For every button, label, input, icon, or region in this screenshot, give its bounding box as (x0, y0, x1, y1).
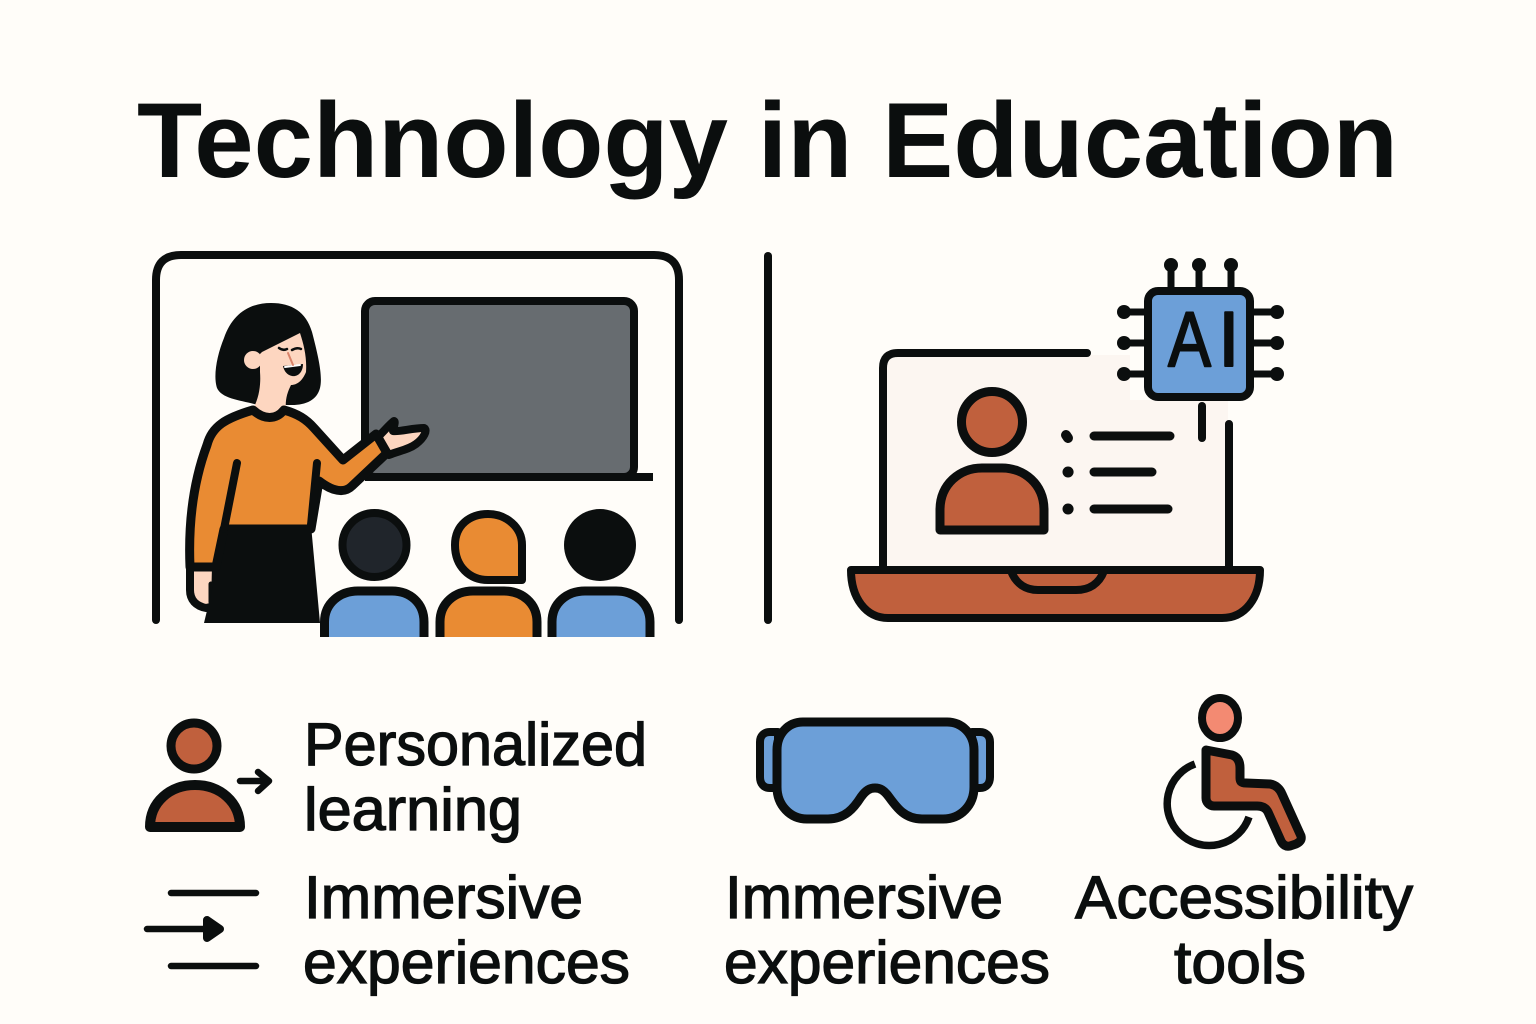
profile list (1066, 435, 1170, 509)
label: personalized learning (304, 711, 647, 843)
label: accessibility tools: Accessibility (1075, 864, 1413, 931)
AI chip (1117, 258, 1284, 438)
laptop base (851, 570, 1260, 618)
students (324, 509, 650, 637)
label: personalized learning: Personalized (304, 711, 647, 778)
icon: VR goggles (760, 722, 990, 819)
label: immersive experiences left: experiences (303, 929, 630, 996)
label: accessibility tools (1075, 864, 1413, 996)
laptop screen (883, 353, 1229, 568)
icon: wheelchair accessibility (1167, 698, 1301, 846)
label: personalized learning: learning (304, 776, 522, 843)
panel: laptop with AI chip (851, 258, 1284, 618)
panel: classroom illustration (156, 255, 679, 637)
label: accessibility tools: tools (1174, 929, 1306, 996)
icon: personalized learning (150, 723, 269, 827)
blackboard (365, 301, 653, 477)
label: immersive experiences left (303, 864, 630, 996)
label: immersive experiences center: Immersive (725, 864, 1003, 931)
classroom frame (156, 255, 679, 620)
title: Technology in Education (137, 80, 1398, 200)
label: immersive experiences left: Immersive (304, 864, 583, 931)
AI chip: I (1218, 295, 1240, 383)
icon: immersive lines and arrow (147, 893, 256, 966)
label: immersive experiences center (724, 864, 1050, 996)
profile avatar (940, 392, 1044, 530)
label: immersive experiences center: experiences (724, 929, 1050, 996)
AI chip: A (1168, 295, 1211, 383)
teacher (190, 303, 426, 623)
divider line (764, 256, 772, 620)
